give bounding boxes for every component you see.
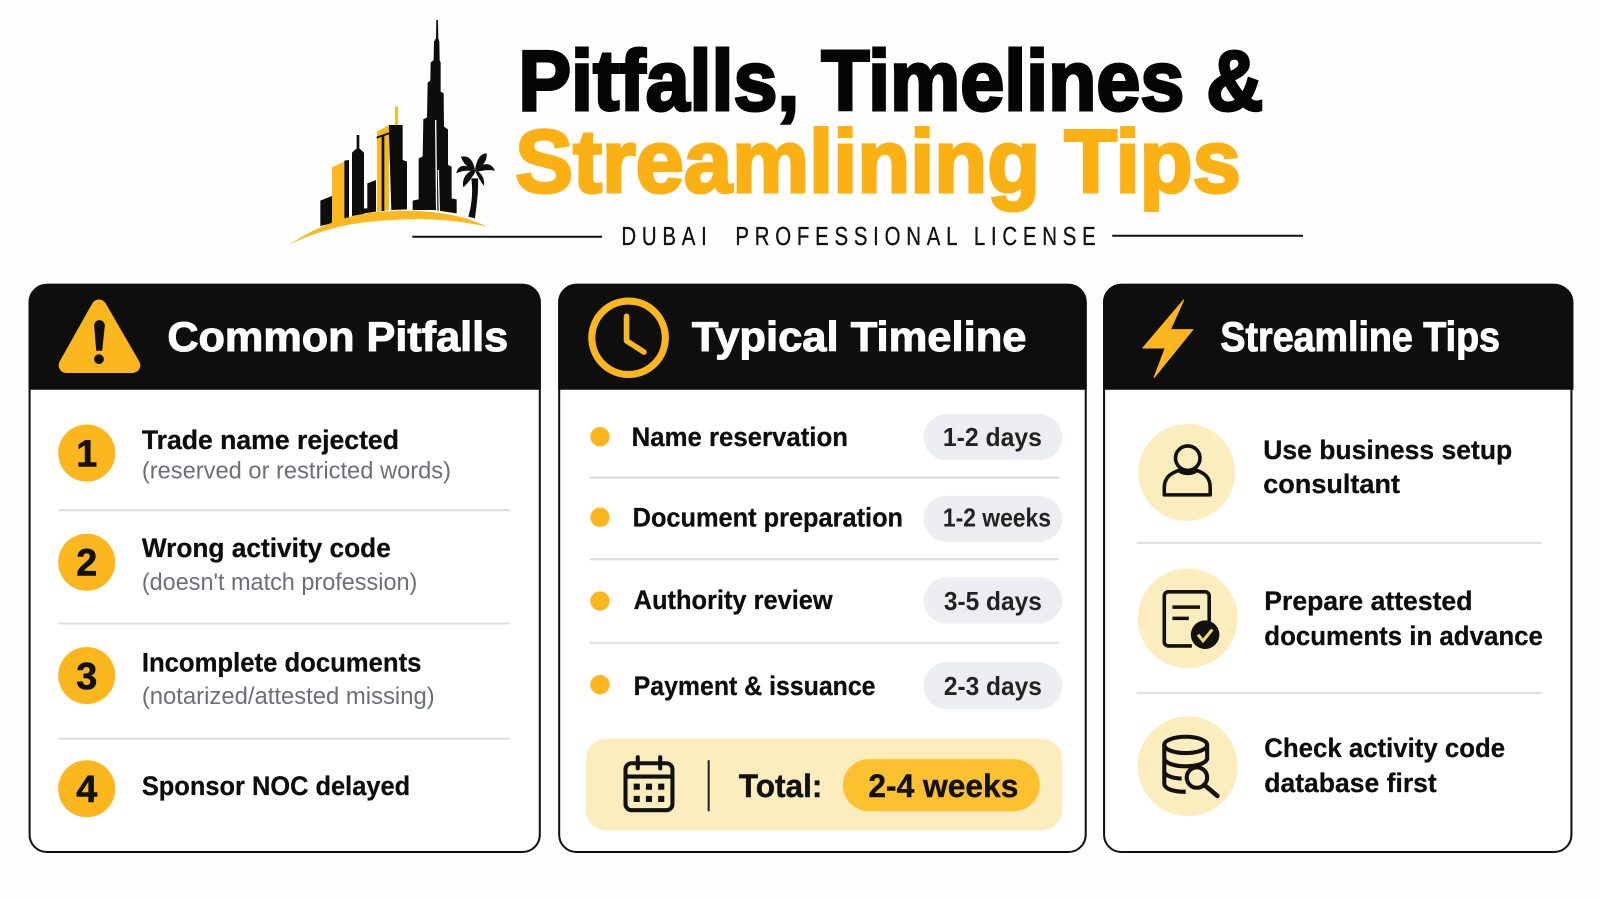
- panel: streamline tips: [1103, 285, 1573, 852]
- item 3: incomplete documents: Incomplete documents: [142, 647, 421, 677]
- panel header: typical timeline: [558, 285, 1087, 390]
- callout: total time: [586, 739, 1062, 831]
- icon: clock: [592, 301, 665, 374]
- item 4: sponsor NOC delayed: Sponsor NOC delayed: [142, 771, 410, 801]
- item 2: wrong activity code: 2: [76, 542, 97, 584]
- row: payment and issuance: [590, 662, 1062, 709]
- title line 1: Pitfalls, Timelines &: [518, 33, 1263, 129]
- panel header: streamline tips: [1103, 285, 1573, 390]
- item 3: incomplete documents: 3: [76, 655, 97, 697]
- icon: Dubai skyline logo: [288, 20, 495, 245]
- row: payment and issuance: Payment & issuance: [634, 671, 876, 701]
- tip: prepare attested documents: [1138, 568, 1543, 668]
- title line 2: Streamlining Tips: [515, 112, 1241, 211]
- icon: warning triangle: [66, 307, 133, 365]
- item 1: trade name rejected: Trade name rejected: [142, 425, 399, 455]
- tip: business setup consultant: Use business setup: [1263, 435, 1512, 465]
- callout: total time: Total:: [739, 767, 822, 804]
- item 3: incomplete documents: (notarized/attested missing): [142, 683, 435, 710]
- item 4: sponsor NOC delayed: 4: [76, 768, 97, 810]
- row: authority review: 3-5 days: [944, 588, 1042, 616]
- heading: typical timeline: Typical Timeline: [692, 313, 1027, 360]
- item 2: wrong activity code: (doesn't match profession): [142, 569, 417, 596]
- tip: prepare attested documents: Prepare attested: [1264, 586, 1472, 616]
- panel: common pitfalls: [29, 285, 541, 852]
- tip: check activity code database: Check activity code: [1264, 733, 1505, 763]
- panel header: common pitfalls: [29, 285, 541, 390]
- icon: person: [1164, 446, 1210, 495]
- row: name reservation: 1-2 days: [943, 424, 1042, 452]
- row: document preparation: 1-2 weeks: [943, 505, 1051, 533]
- tip: check activity code database: database first: [1264, 768, 1437, 798]
- row: name reservation: [590, 414, 1062, 460]
- row: payment and issuance: 2-3 days: [944, 673, 1042, 701]
- icon: calendar: [626, 757, 672, 810]
- heading: common pitfalls: Common Pitfalls: [167, 313, 508, 360]
- icon: lightning bolt: [1143, 300, 1193, 378]
- tip: business setup consultant: [1138, 424, 1512, 521]
- callout: total time: 2-4 weeks: [868, 767, 1018, 804]
- row: authority review: [590, 578, 1062, 623]
- row: authority review: Authority review: [634, 585, 833, 615]
- subtitle: DUBAI PROFESSIONAL LICENSE: [621, 222, 1096, 250]
- item 1: trade name rejected: 1: [76, 432, 97, 474]
- heading: streamline tips: Streamline Tips: [1220, 313, 1500, 360]
- tip: check activity code database: [1138, 716, 1505, 816]
- item 1: trade name rejected: (reserved or restricted words): [142, 458, 451, 485]
- icon: database search: [1164, 737, 1217, 796]
- row: document preparation: Document preparation: [633, 503, 903, 533]
- icon: document with check: [1164, 592, 1219, 649]
- item 4: sponsor NOC delayed: [58, 760, 410, 817]
- item 3: incomplete documents: [58, 647, 435, 710]
- tip: prepare attested documents: documents in advance: [1264, 621, 1543, 651]
- row: name reservation: Name reservation: [632, 422, 848, 452]
- item 1: trade name rejected: [58, 424, 451, 485]
- item 2: wrong activity code: [58, 533, 417, 596]
- item 2: wrong activity code: Wrong activity code: [142, 533, 391, 563]
- panel: typical timeline: [558, 285, 1087, 852]
- row: document preparation: [590, 496, 1062, 542]
- tip: business setup consultant: consultant: [1263, 469, 1400, 499]
